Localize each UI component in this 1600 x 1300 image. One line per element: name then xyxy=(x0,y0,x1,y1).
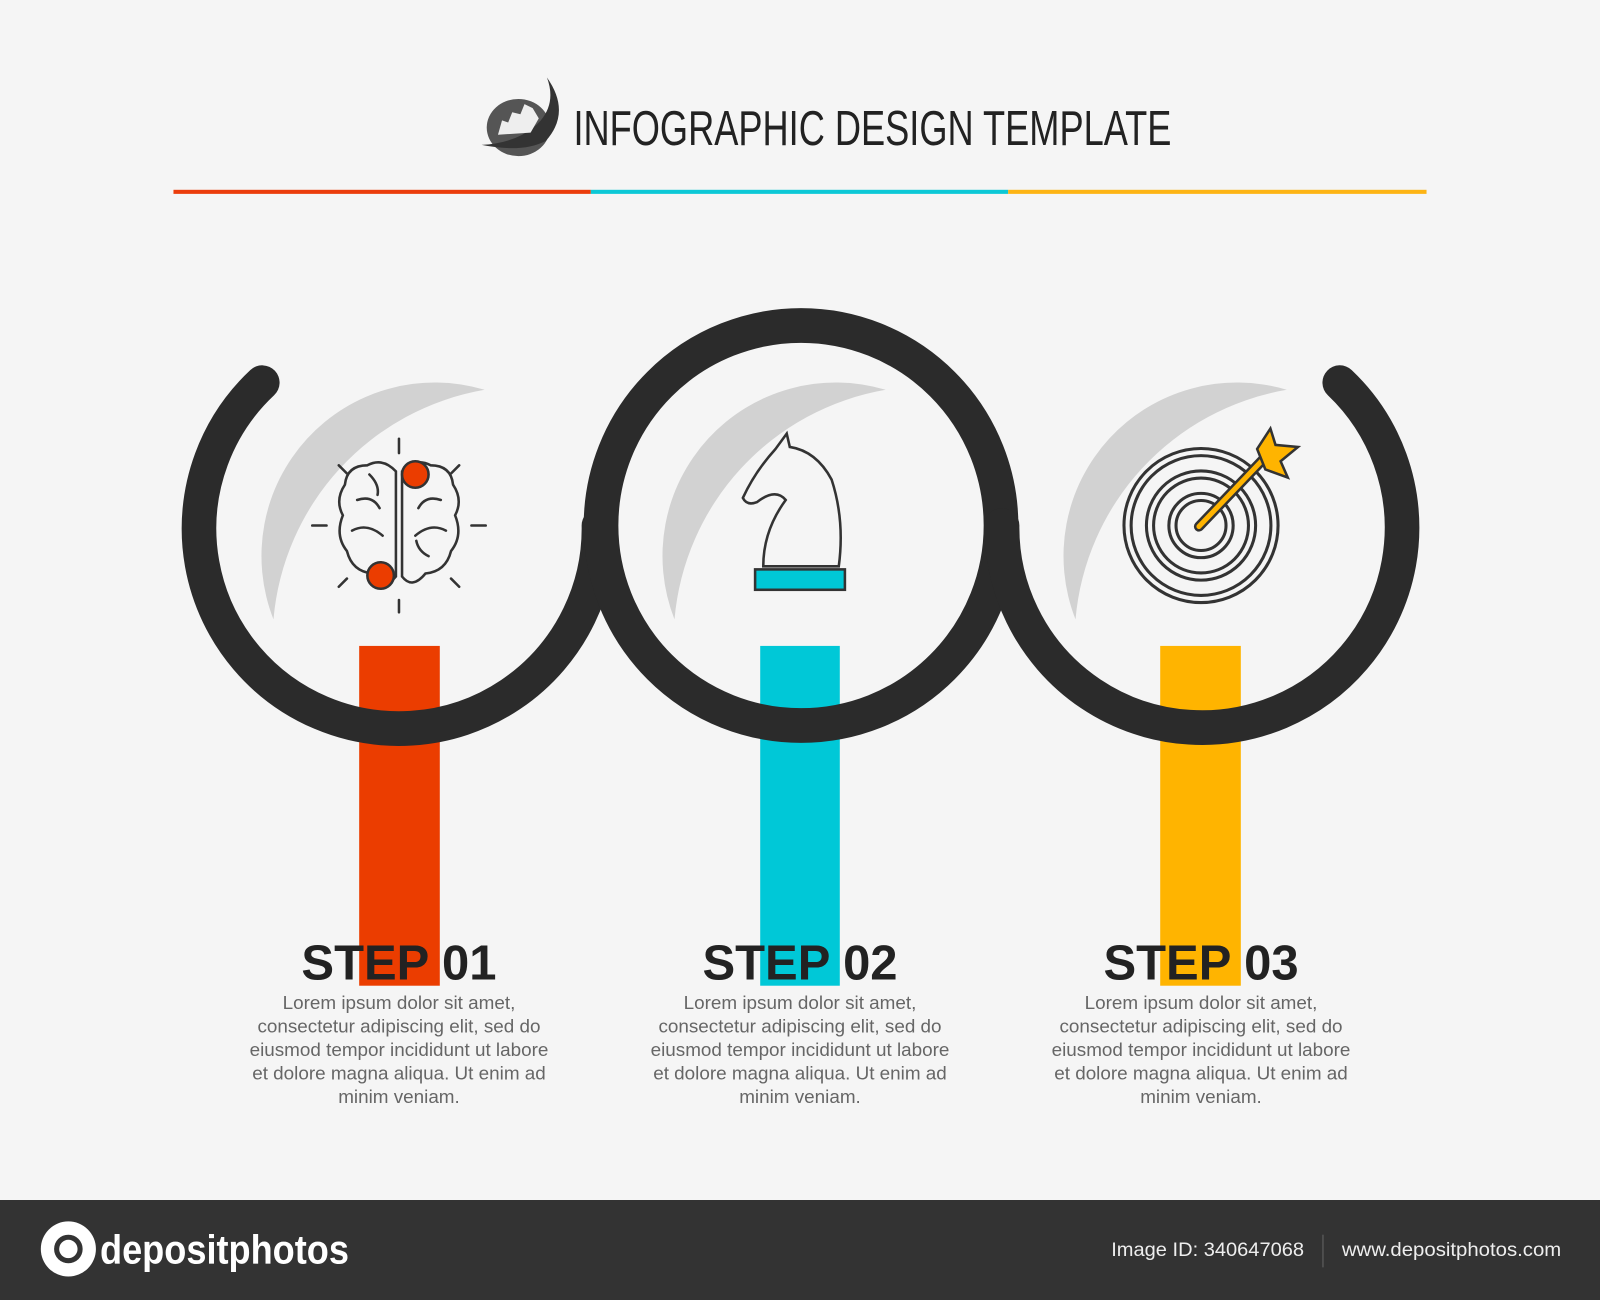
step 03 text: et dolore magna aliqua. Ut enim ad xyxy=(1054,1063,1348,1084)
color rule xyxy=(173,190,1427,194)
footer url: www.depositphotos.com xyxy=(1341,1239,1561,1261)
step 01 text: consectetur adipiscing elit, sed do xyxy=(257,1016,541,1037)
step 02 text: Lorem ipsum dolor sit amet, xyxy=(684,992,916,1013)
step 03 text xyxy=(1052,937,1350,1107)
step 02 text: minim veniam. xyxy=(739,1086,861,1107)
step 03 text: eiusmod tempor incididunt ut labore xyxy=(1052,1039,1350,1060)
icon: brain xyxy=(312,439,486,612)
bars xyxy=(359,646,1241,986)
connected circles line xyxy=(199,326,1402,729)
step 01 text: Lorem ipsum dolor sit amet, xyxy=(283,992,515,1013)
icon: target xyxy=(1128,429,1298,599)
footer id: Image ID: 340647068 xyxy=(1111,1239,1304,1261)
step 03 text: Lorem ipsum dolor sit amet, xyxy=(1085,992,1317,1013)
step 03 text: consectetur adipiscing elit, sed do xyxy=(1059,1016,1343,1037)
icon: knight xyxy=(743,434,845,590)
step 01 text: et dolore magna aliqua. Ut enim ad xyxy=(252,1063,546,1084)
step 03 text: minim veniam. xyxy=(1140,1086,1262,1107)
logo icon xyxy=(482,78,559,156)
step 01 text xyxy=(250,937,548,1107)
grey crescents xyxy=(261,383,1287,619)
step 02 text: STEP 02 xyxy=(702,937,898,991)
step 02 text: et dolore magna aliqua. Ut enim ad xyxy=(653,1063,947,1084)
title: INFOGRAPHIC DESIGN TEMPLATE xyxy=(573,102,1171,156)
step 02 text: eiusmod tempor incididunt ut labore xyxy=(651,1039,949,1060)
footer logo xyxy=(41,1221,349,1277)
step 01 text: STEP 01 xyxy=(301,937,497,991)
step 01 text: eiusmod tempor incididunt ut labore xyxy=(250,1039,548,1060)
step 03 text: STEP 03 xyxy=(1103,937,1299,991)
step 02 text: consectetur adipiscing elit, sed do xyxy=(658,1016,942,1037)
step 02 text xyxy=(651,937,949,1107)
footer bar xyxy=(0,1200,1600,1300)
footer logo: depositphotos xyxy=(100,1226,349,1272)
step 01 text: minim veniam. xyxy=(338,1086,460,1107)
